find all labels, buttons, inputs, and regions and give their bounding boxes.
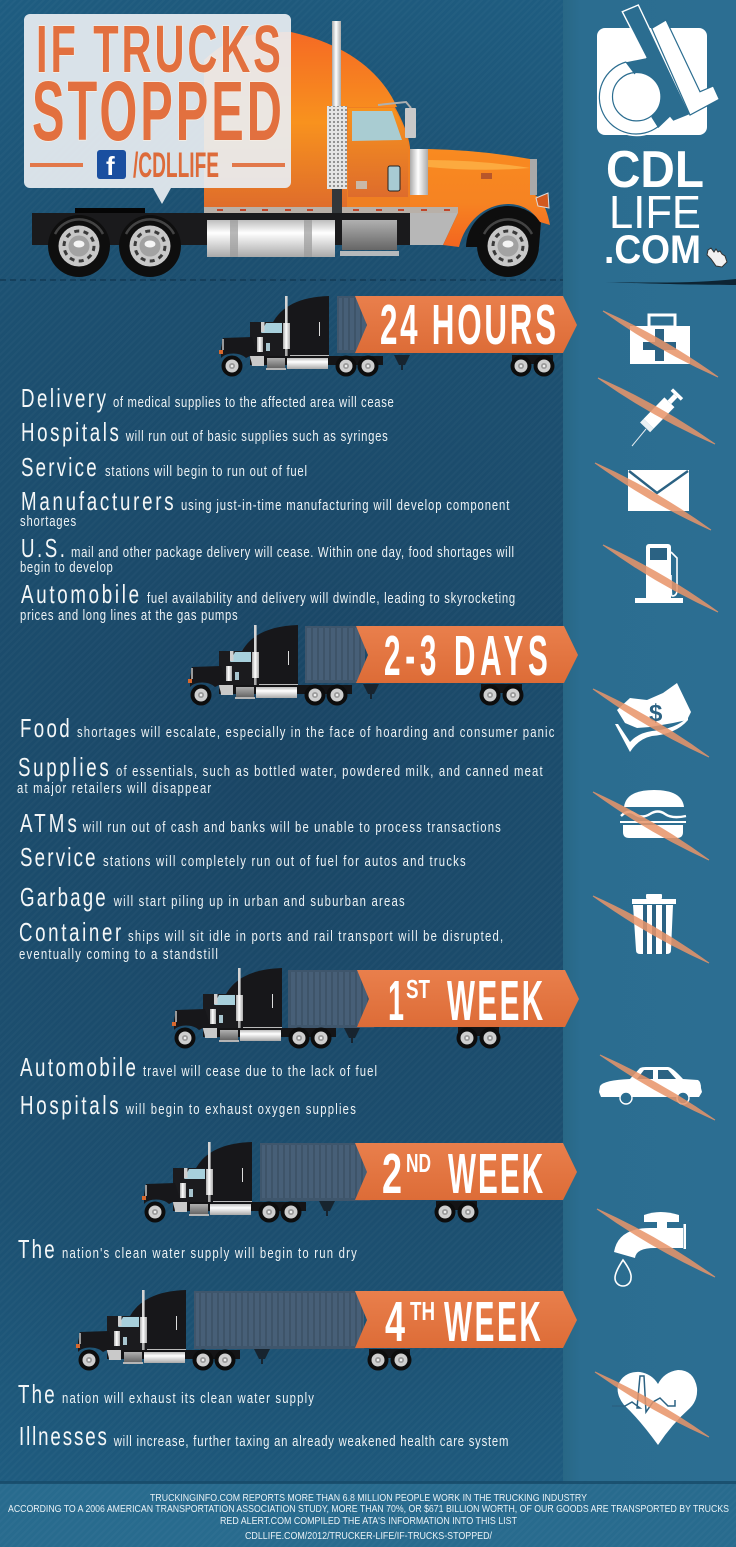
item: container — [19, 917, 503, 962]
banner: 2nd week: ND — [406, 1148, 431, 1178]
item: hospitals: Hospitals — [20, 1090, 119, 1120]
banner: 1st week: 1 — [388, 969, 404, 1033]
icon: mail envelope — [595, 463, 711, 530]
title speech bubble — [24, 12, 291, 204]
facebook row — [30, 146, 285, 185]
item: illnesses — [19, 1421, 508, 1451]
item: service: Service — [20, 842, 96, 872]
banner: 4th week: 4 — [385, 1290, 405, 1354]
icon: fuel pump — [603, 544, 718, 612]
logo word: .COM: .COM — [604, 228, 701, 272]
item: garbage: Garbage — [20, 882, 106, 912]
icon: medical kit — [603, 311, 718, 377]
item: service: Service — [21, 452, 97, 482]
icon: car — [599, 1055, 715, 1120]
item: container: Container — [19, 917, 122, 947]
item: automobile: prices and long lines at the gas pumps — [20, 607, 238, 623]
logo mark — [597, 5, 719, 136]
item: hospitals — [20, 1090, 356, 1120]
banner: 2nd week — [355, 1142, 577, 1206]
item: delivery: Delivery — [21, 383, 107, 413]
truck: 1st week — [172, 968, 500, 1048]
banner: 2-3 days: 2-3 DAYS — [384, 624, 548, 688]
item: automobile: fuel availability and delivery will dwindle, leading to skyrocketing — [147, 590, 515, 606]
banner: 1st week — [357, 969, 579, 1033]
banner: 2nd week: 2 — [382, 1142, 402, 1206]
hood and fender — [410, 149, 550, 247]
fuel tank — [207, 220, 335, 257]
sidebar shadow — [605, 279, 736, 285]
item: us mail: U.S. — [21, 533, 65, 563]
item: the nation: nation will exhaust its clean water supply — [62, 1390, 314, 1406]
item: garbage: will start piling up in urban and suburban areas — [113, 893, 405, 909]
item: container: eventually coming to a standstill — [19, 946, 218, 962]
text list: 2-3 days — [17, 713, 555, 962]
banner: 4th week: TH — [410, 1296, 435, 1326]
footer text — [8, 1492, 729, 1542]
item: hospitals — [21, 417, 388, 447]
item: automobile: Automobile — [20, 1052, 136, 1082]
item: service: stations will begin to run out of fuel — [105, 463, 307, 479]
item: atms — [20, 808, 501, 838]
text list: 4th week — [18, 1379, 508, 1451]
item: supplies: Supplies — [18, 752, 109, 782]
icon: cash: $ — [649, 700, 663, 727]
item: supplies: of essentials, such as bottled water, powdered milk, and canned meat — [116, 763, 543, 779]
sleeper — [204, 32, 397, 213]
footer text: CDLLIFE.COM/2012/TRUCKER-LIFE/IF-TRUCKS-STOPPED/ — [245, 1530, 492, 1542]
CDL Life logo — [597, 5, 727, 272]
item: automobile — [20, 579, 515, 623]
item: supplies: at major retailers will disappear — [17, 780, 212, 796]
banner: 4th week — [355, 1290, 577, 1354]
item: manufacturers: using just-in-time manufacturing will develop component — [181, 497, 510, 513]
truck: 24 hours — [219, 296, 554, 376]
logo word: LIFE: LIFE — [609, 186, 701, 238]
item: hospitals: will run out of basic supplies such as syringes — [125, 428, 388, 444]
truck: 4th week — [76, 1290, 412, 1370]
banner: 4th week: WEEK — [444, 1290, 541, 1354]
item: manufacturers — [20, 486, 510, 529]
chassis — [32, 213, 410, 245]
item: illnesses: Illnesses — [19, 1421, 107, 1451]
icon: heart with pulse — [595, 1370, 709, 1445]
item: the nation — [18, 1379, 314, 1409]
icon: hand cursor — [707, 248, 727, 267]
truck: 2nd week — [142, 1142, 478, 1222]
item: supplies — [17, 752, 543, 796]
sill — [204, 207, 458, 213]
icon: hamburger — [593, 790, 709, 860]
icon: syringe — [598, 378, 715, 446]
footer text: RED ALERT.COM COMPILED THE ATA'S INFORMATION INTO THIS LIST — [220, 1515, 517, 1527]
step — [342, 220, 397, 250]
facebook row: f — [106, 151, 115, 181]
text: 2nd week — [18, 1234, 357, 1264]
item: automobile: travel will cease due to the lack of fuel — [143, 1063, 377, 1079]
footer text: TRUCKINGINFO.COM REPORTS MORE THAN 6.8 MILLION PEOPLE WORK IN THE TRUCKING INDUSTRY — [150, 1492, 587, 1504]
item: automobile: Automobile — [21, 579, 139, 609]
item: hospitals: Hospitals — [21, 417, 119, 447]
wheels — [48, 215, 539, 277]
item: automobile — [20, 1052, 377, 1082]
item: atms: will run out of cash and banks will be unable to process transactions — [82, 819, 501, 835]
text list: 1st week — [20, 1052, 377, 1120]
item: atms: ATMs — [20, 808, 77, 838]
item: garbage — [20, 882, 405, 912]
banner: 24 hours: 24 HOURS — [380, 292, 556, 356]
footer panel background — [0, 1481, 736, 1547]
sidebar panel — [563, 0, 736, 1484]
item: us mail: begin to develop — [20, 559, 113, 575]
item: food: Food — [20, 713, 70, 743]
icon: trash can — [593, 894, 709, 963]
logo word: CDL: CDL — [606, 141, 704, 199]
item: food: shortages will escalate, especially in the face of hoarding and consumer panic — [77, 724, 555, 740]
icon: water tap — [597, 1209, 715, 1286]
item: illnesses: will increase, further taxing an already weakened health care system — [113, 1433, 508, 1449]
truck: 2-3 days — [188, 625, 524, 706]
dashed divider — [0, 279, 563, 281]
item: us mail — [20, 533, 514, 575]
text list: 24 hours — [20, 383, 515, 623]
item: delivery: of medical supplies to the affected area will cease — [113, 394, 394, 410]
item: hospitals: will begin to exhaust oxygen supplies — [125, 1101, 356, 1117]
item: the nation: The — [18, 1379, 55, 1409]
text: 2nd week: nation's clean water supply will begin to run dry — [62, 1245, 357, 1261]
icon: cash — [593, 683, 709, 757]
banner: 1st week: WEEK — [447, 969, 543, 1033]
title: if trucks: IF TRUCKS — [36, 12, 281, 86]
title: stopped: STOPPED — [32, 64, 282, 158]
item: service — [20, 842, 466, 872]
hero orange truck — [32, 21, 550, 277]
cab — [347, 107, 410, 208]
item: food — [20, 713, 555, 743]
item: manufacturers: Manufacturers — [21, 486, 174, 516]
banner: 1st week: ST — [406, 974, 430, 1004]
item: container: ships will sit idle in ports and rail transport will be disrupted, — [128, 928, 503, 944]
item: manufacturers: shortages — [20, 513, 77, 529]
stack and muffler — [332, 21, 341, 107]
item: service — [21, 452, 307, 482]
item: service: stations will completely run out of fuel for autos and trucks — [103, 853, 466, 869]
banner: 2nd week: WEEK — [448, 1142, 543, 1206]
item: us mail: mail and other package delivery will cease. Within one day, food shortages will — [71, 544, 514, 560]
text: 2nd week: The — [18, 1234, 55, 1264]
facebook row: /CDLLIFE — [133, 146, 219, 185]
item: delivery — [21, 383, 394, 413]
